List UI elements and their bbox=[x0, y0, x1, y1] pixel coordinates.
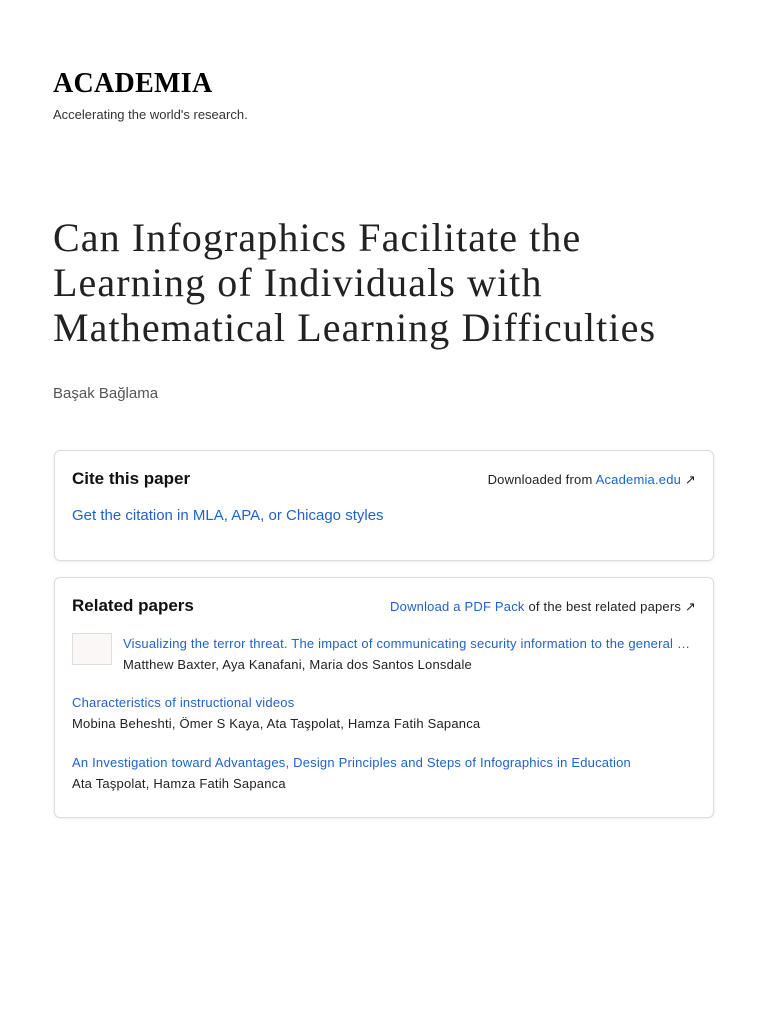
title: Mathematical Learning Difficulties bbox=[53, 305, 656, 350]
paper 1 bbox=[123, 636, 697, 672]
downloaded from: Downloaded from Academia.edu ↗ bbox=[488, 472, 696, 487]
author: Başak Bağlama bbox=[53, 385, 158, 402]
paper 2: Characteristics of instructional videos bbox=[72, 695, 294, 710]
title: Learning of Individuals with bbox=[53, 260, 543, 305]
paper 2 bbox=[72, 695, 480, 731]
title: Can Infographics Facilitate the bbox=[53, 215, 581, 260]
panel: related papers bbox=[54, 577, 714, 818]
pdf pack: Download a PDF Pack of the best related papers ↗ bbox=[390, 599, 696, 614]
paper 3: An Investigation toward Advantages, Design Principles and Steps of Infographics in Education bbox=[72, 755, 631, 770]
panel: cite bbox=[54, 450, 714, 561]
thumbnail bbox=[72, 633, 112, 665]
logo: ACADEMIA bbox=[53, 68, 213, 99]
paper 3 bbox=[72, 755, 631, 791]
title bbox=[53, 215, 656, 350]
heading: related: Related papers bbox=[72, 596, 194, 615]
tagline: Accelerating the world's research. bbox=[53, 107, 248, 122]
heading: cite: Cite this paper bbox=[72, 469, 190, 488]
paper 3: Ata Taşpolat, Hamza Fatih Sapanca bbox=[72, 776, 286, 791]
citation link: Get the citation in MLA, APA, or Chicago styles bbox=[72, 507, 384, 524]
paper 2: Mobina Beheshti, Ömer S Kaya, Ata Taşpolat, Hamza Fatih Sapanca bbox=[72, 716, 480, 731]
paper 1: Matthew Baxter, Aya Kanafani, Maria dos Santos Lonsdale bbox=[123, 657, 472, 672]
